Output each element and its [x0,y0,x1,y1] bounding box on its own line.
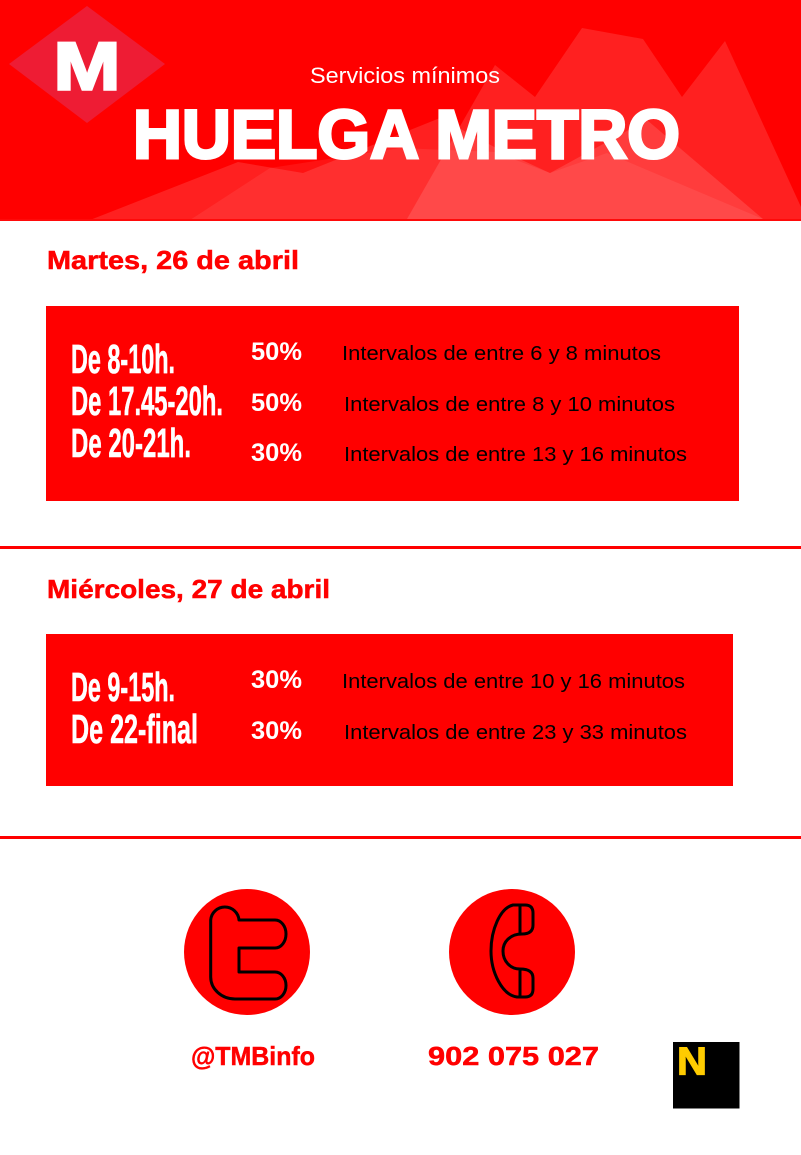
icon: telephone [449,889,575,1015]
label: twitter handle: @TMBinfo [191,1041,315,1071]
row: 22-final [71,706,687,752]
row: 9-15h: Intervalos de entre 10 y 16 minutos [342,671,685,693]
panel: Tuesday schedule [46,306,739,501]
subtitle: Servicios mínimos [310,63,500,88]
logo diamond [9,6,165,123]
title: HUELGA METRO [133,96,680,173]
row: 8-10h: De 8-10h. [71,336,175,382]
row: 8-10h: Intervalos de entre 6 y 8 minutos [342,343,661,365]
row: 9-15h: 30% [251,666,302,694]
logo: N [673,1040,740,1108]
row: 20-21h [71,420,687,467]
row: 17.45-20h: De 17.45-20h. [71,378,223,424]
icon: twitter [184,889,310,1015]
heading: Wednesday: Miércoles, 27 de abril [47,574,330,604]
row: 20-21h: 30% [251,439,302,467]
row: 22-final: 30% [251,717,302,745]
row: 17.45-20h: 50% [251,389,302,417]
row: 9-15h: De 9-15h. [71,664,175,710]
row: 8-10h: 50% [251,338,302,366]
logo letter M: M [54,28,120,104]
heading: Tuesday: Martes, 26 de abril [47,245,299,275]
row: 22-final: Intervalos de entre 23 y 33 minutos [344,722,687,744]
row: 9-15h [71,664,685,710]
panel: Wednesday schedule [46,634,733,786]
row: 20-21h: De 20-21h. [71,420,191,466]
row: 17.45-20h [71,378,675,424]
row: 17.45-20h: Intervalos de entre 8 y 10 minutos [344,394,675,416]
label: phone number: 902 075 027 [428,1041,599,1071]
header banner [0,0,801,221]
row: 20-21h: Intervalos de entre 13 y 16 minutos [344,444,687,466]
row: 8-10h [71,336,661,382]
logo: N: N [677,1040,707,1084]
row: 22-final: De 22-final [71,706,198,752]
